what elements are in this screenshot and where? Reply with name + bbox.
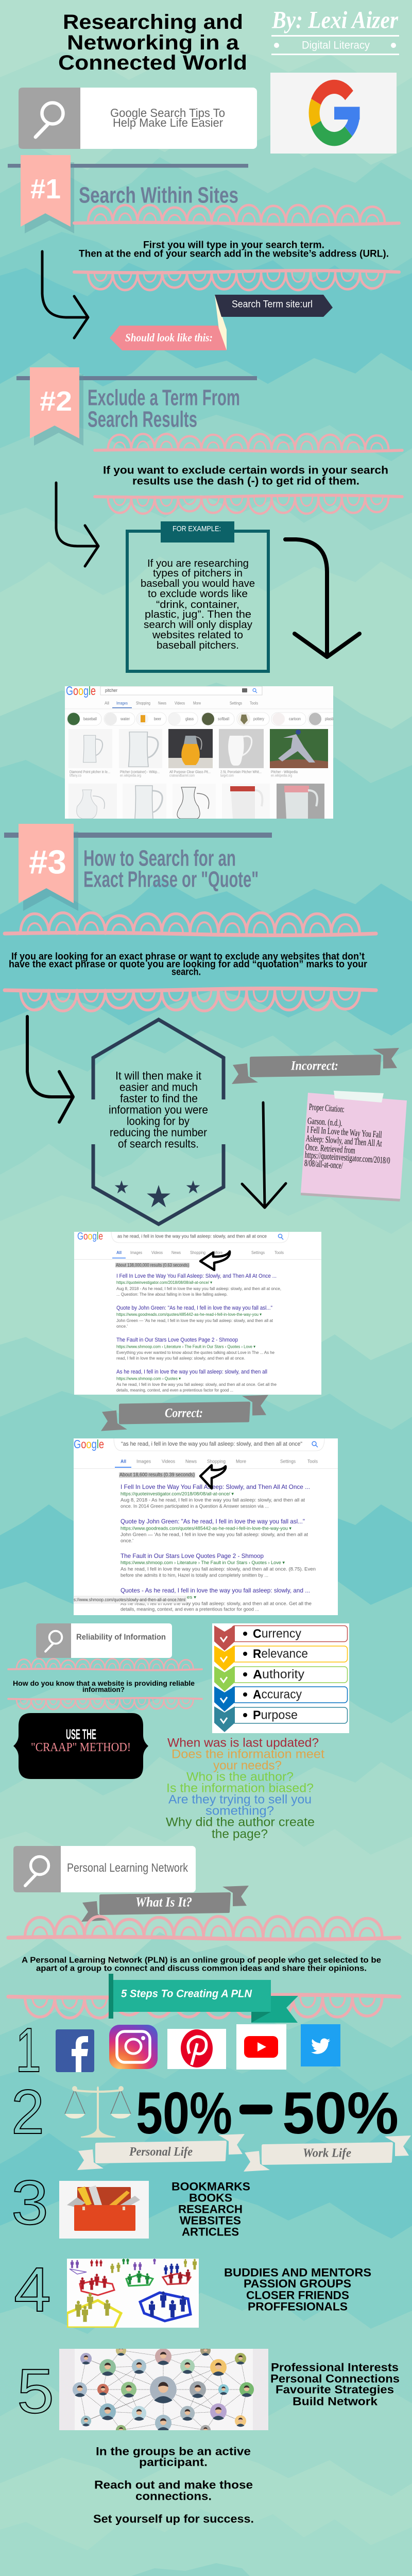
screenshot: google image search: Tools: [250, 701, 258, 706]
screenshot: correct search results: https://quoteinvestigator.com/2018/08/08/all-at-once/ ▾: [121, 1491, 234, 1497]
ribbon: correct: [101, 1395, 268, 1431]
ribbon: what is it: What Is It?: [135, 1895, 192, 1909]
text: reliability question: How do you know that a website is providing reliable: [13, 1679, 195, 1687]
scallop border: [8, 1995, 400, 2018]
text: craap questions: When was is last updated?: [167, 1736, 319, 1750]
screenshot: google image search: Settings: [230, 701, 242, 706]
screenshot: google image search: Videos: [175, 701, 185, 706]
text: tip 3 instructions: search.: [171, 967, 201, 978]
screenshot: correct search results: Videos: [162, 1459, 175, 1464]
text: tip 2 instructions: If you want to exclude certain words in your search: [103, 465, 388, 476]
screenshot: google image search: baseball: [83, 717, 97, 721]
screenshot: incorrect search results: As he read, I fell in love the way you fall asleep: slowly, and then all at once. Get all the: [116, 1382, 277, 1387]
text: step 5 interests: [270, 2361, 400, 2408]
text: step 3 resources: BOOKMARKS: [171, 2180, 250, 2193]
step 4 number: 4: [14, 2255, 51, 2325]
text: tip 1 instructions: Then at the end of your search add in the website’s address (URL).: [79, 248, 389, 260]
screenshot: correct search results: Shopping: [207, 1459, 226, 1464]
icon: pinterest: [167, 2029, 226, 2069]
stat: 50 percent personal life: 50%: [136, 2080, 232, 2146]
text: step 4 groups: PROFFESIONALS: [248, 2300, 348, 2313]
arrow: hand drawn pointer: [200, 1251, 230, 1270]
text: closing advice: connections.: [135, 2489, 212, 2503]
title: Networking in a: [67, 31, 239, 54]
panel: for example: to exclude words like: [148, 588, 248, 600]
screenshot: incorrect search results: https://www.shmoop.com › Literature › The Fault in Our Stars › Quotes › Love ▾: [116, 1344, 256, 1349]
scallop border: [95, 434, 402, 452]
screenshot: google image search: All: [105, 701, 109, 706]
heading: exclude a term: [88, 385, 240, 432]
text: step 5 interests: Professional Interests: [271, 2361, 399, 2374]
panel: for example: If you are researching: [147, 558, 249, 569]
text: pln definition: A Personal Learning Network (PLN) is an online group of people who get selected to be: [22, 1956, 381, 1965]
sticky note: proper citation: [301, 1091, 407, 1201]
screenshot: correct search results: News: [185, 1459, 197, 1464]
text: pln definition: apart of a group to connect and discuss common ideas and share their opinions.: [36, 1964, 367, 1973]
screenshot: correct search results: About 18,600 results (0.39 seconds): [119, 1472, 195, 1478]
sticky note: proper citation: Once. Retrieved from: [305, 1142, 355, 1156]
screenshot: incorrect search results: Tools: [274, 1250, 284, 1255]
text: step 4 groups: BUDDIES AND MENTORS: [224, 2266, 371, 2279]
chart: CRAAP list: Relevance: [253, 1647, 308, 1661]
panel: for example: search will only display: [144, 619, 252, 631]
text: craap questions: [166, 1736, 324, 1841]
scallop border: [74, 270, 399, 290]
image: people groups: [67, 2258, 199, 2328]
screenshot: incorrect search results: Everything you ever wanted to know about the quotes talking about Love in The ... As he: [116, 1350, 274, 1355]
screenshot: correct search results: As he read, I fell in love the way you fall asleep: slowly, and then all at once. (8.75). Even: [121, 1566, 316, 1572]
screenshot: incorrect search results: All: [116, 1250, 122, 1255]
panel: hexagon text: information you were: [109, 1104, 208, 1116]
screenshot: incorrect search results: Videos: [151, 1250, 163, 1255]
screenshot: incorrect search results: More: [214, 1250, 222, 1255]
screenshot: google image search: Google: [66, 684, 96, 698]
screenshot: correct search results: I Fell In Love the Way You Fall Asleep: Slowly, and Then All At Once ...: [121, 1483, 310, 1490]
screenshot: incorrect search results: Quote by John Green: "As he read, I fell in love the way you fall asl...": [116, 1305, 272, 1311]
stat: 50 percent personal life: Personal Life: [129, 2145, 193, 2159]
text: craap questions: Who is the author?: [186, 1770, 294, 1784]
screenshot: incorrect search results: Images: [130, 1250, 142, 1255]
dash between stats: [239, 2105, 272, 2114]
screenshot: incorrect search results: Google: [77, 1231, 103, 1242]
screenshot: incorrect search results: John Green — 'As he read, I fell in love the way you fall asleep: slowly, and then all at: [116, 1318, 273, 1323]
screenshot: incorrect search results: https://www.shmoop.com › Quotes ▾: [116, 1376, 181, 1381]
panel: hexagon text: It will then make it: [115, 1070, 201, 1082]
title: [58, 11, 247, 74]
screenshot: incorrect search results: [74, 1231, 321, 1395]
ribbon: what is it: [81, 1886, 249, 1922]
panel: google search tips: Google Search Tips To: [110, 106, 225, 120]
text: tip 3 instructions: [9, 951, 368, 978]
text: closing advice: [93, 2445, 254, 2526]
screenshot: correct search results: before she admits it to him, Hazel is totally and completely smitten by ...: [121, 1572, 268, 1579]
screenshot: correct search results: Quote by John Green: "As he read, I fell in love the way you fall asl...": [121, 1518, 305, 1525]
icon: instagram: [109, 2025, 158, 2069]
chart: CRAAP list: Currency: [253, 1627, 301, 1640]
screenshot: google image search: target.com: [220, 774, 234, 778]
screenshot: incorrect search results: Aug 8, 2018 - As he read, I fell in love the way you fall asleep: slowly, and then all at once,: [116, 1286, 281, 1291]
screenshot: google image search: All Purpose Clear Glass Pit...: [169, 771, 211, 774]
scallop border: [5, 989, 376, 1011]
screenshot: incorrect search results: ... Question: The line about falling in love is like falling asleep.: [116, 1292, 228, 1297]
tag: should look like this: Search Term site:url: [232, 299, 313, 310]
panel: for example: websites related to: [152, 630, 243, 641]
screenshot: google image search: Shopping: [136, 701, 150, 706]
icon: youtube: [236, 2024, 286, 2070]
screenshot: incorrect search results: Settings: [251, 1250, 265, 1255]
arrow: [27, 1016, 73, 1122]
step 1 number: 1: [15, 2015, 41, 2085]
text: step 3 resources: BOOKS: [189, 2192, 232, 2204]
text: tip 1 instructions: First you will type in your search term.: [143, 240, 324, 250]
panel: reliability of information: [36, 1623, 172, 1658]
screenshot: google image search: en.wikipedia.org: [120, 774, 141, 778]
image: people network: [59, 2345, 268, 2435]
screenshot: google image search: 2.5L Porcelain Pitcher Whit...: [220, 771, 262, 774]
banner: tip 3: [4, 824, 272, 911]
screenshot: google image search: More: [193, 701, 201, 706]
ribbon: incorrect: [232, 1048, 399, 1084]
text: reliability question: information?: [82, 1685, 125, 1693]
ribbon: incorrect: Incorrect:: [290, 1059, 338, 1073]
screenshot: correct search results: once. In 2014 Green participated in a Question & Answer session via ...: [121, 1503, 269, 1510]
panel: for example: “drink, container,: [156, 599, 239, 611]
scallop border: [8, 1698, 202, 1709]
panel: for example: [127, 521, 268, 671]
panel: hexagon text: easier and much: [119, 1081, 198, 1093]
text: craap questions: the page?: [212, 1827, 268, 1841]
panel: personal learning network: Personal Learning Network: [67, 1861, 188, 1874]
step 3 number: 3: [11, 2167, 48, 2238]
heading: exact phrase: Exact Phrase or "Quote": [83, 867, 259, 892]
screenshot: correct search results: The Fault in Our Stars Love Quotes Page 2 - Shmoop: [121, 1552, 264, 1560]
screenshot: incorrect search results: https://www.goodreads.com/quotes/485442-as-he-read-i-fell-in-love-the-way-you ▾: [116, 1312, 262, 1317]
panel: hexagon text: reducing the number: [110, 1126, 207, 1139]
screenshot: correct search results: details, meaning, context, and even a pretentious factor for good ...: [121, 1606, 259, 1613]
panel: reliability of information: Reliability of Information: [76, 1633, 166, 1641]
screenshot: incorrect search results: read, I fell in love the way you fall asleep: slowly, and then all at once.: [116, 1355, 245, 1361]
screenshot: google image search: softball: [218, 717, 229, 721]
text: craap questions: Why did the author create: [166, 1816, 315, 1829]
arrow: [285, 539, 359, 657]
scallop border: [8, 1659, 202, 1670]
screenshot: correct search results: Images: [136, 1459, 151, 1464]
text: craap questions: Are they trying to sell you: [168, 1793, 312, 1806]
ribbon: correct: Correct:: [165, 1406, 203, 1420]
screenshot: correct search results: https://www.shmoop.com › Literature › The Fault in Our Stars › Quotes › Love ▾: [121, 1560, 285, 1566]
screenshot: correct search results: John Green — 'As he read, I fell in love the way you fall asleep: slowly, and then all at: [121, 1532, 308, 1537]
text: step 4 groups: CLOSER FRIENDS: [246, 2289, 349, 2302]
author byline: [271, 6, 399, 55]
screenshot: correct search results: Quotes - As he read, I fell in love the way you fall asleep: slowly, and ...: [121, 1587, 310, 1594]
screenshot: incorrect search results: Shopping: [190, 1250, 205, 1255]
text: tip 3 instructions: If you are looking for an exact phrase or want to exclude any websites that don’t: [11, 951, 365, 962]
text: closing advice: participant.: [139, 2455, 208, 2469]
chart: CRAAP list: Authority: [253, 1667, 304, 1682]
sticky note: proper citation: Garson. (n.d.).: [307, 1115, 343, 1129]
text: tip 2 instructions: [103, 465, 388, 487]
text: step 4 groups: [224, 2266, 371, 2313]
sticky note: proper citation: Proper Citation:: [308, 1101, 345, 1114]
text: step 5 interests: Favourite Strategies: [276, 2383, 394, 2396]
scallop border: [8, 1917, 400, 1939]
banner: tip 1: #1: [30, 174, 61, 205]
scallop border: [74, 205, 399, 225]
text: step 5 interests: Build Network: [293, 2395, 378, 2408]
text: step 4 groups: PASSION GROUPS: [244, 2277, 351, 2290]
screenshot: correct search results: Settings: [280, 1459, 296, 1464]
text: step 3 resources: RESEARCH: [178, 2203, 243, 2215]
text: step 3 resources: ARTICLES: [182, 2226, 239, 2238]
screenshot: incorrect search results: As he read, I fell in love the way you fall asleep: slowly, and then all: [116, 1369, 267, 1375]
callout: use the craap method: USE THE: [66, 1726, 96, 1742]
tag: should look like this: Should look like this:: [125, 331, 213, 344]
arrow: [42, 251, 88, 338]
panel: for example: FOR EXAMPLE:: [173, 524, 221, 533]
icon: twitter: [301, 2024, 340, 2066]
banner: tip 1: [8, 155, 248, 233]
text: craap questions: Does the information meet: [171, 1748, 324, 1761]
text: pln definition: [22, 1956, 381, 1973]
author byline: Digital Literacy: [302, 39, 370, 52]
stat: 50 percent work life: Work Life: [303, 2146, 351, 2160]
stat: 50 percent personal life: [77, 2080, 245, 2170]
text: closing advice: Set yourself up for success.: [93, 2512, 254, 2526]
screenshot: incorrect search results: as he read, i fell in love the way you fall asleep: slowly, and then all at once: [117, 1233, 267, 1240]
screenshot: incorrect search results: About 138,000,000 results (0.63 seconds): [116, 1262, 189, 1267]
banner: tip 2: [16, 367, 257, 446]
screenshot: incorrect search results: details, meaning, context, and even a pretentious factor for good ...: [116, 1387, 233, 1393]
screenshot: correct search results: once.': [121, 1538, 133, 1544]
screenshot: google image search: News: [158, 701, 166, 706]
sticky note: proper citation: 8/08/all-at-once/: [304, 1158, 344, 1171]
screenshot: correct search results: More: [236, 1459, 246, 1464]
heading: exact phrase: How to Search for an: [83, 846, 236, 871]
panel: for example: types of pitchers in: [153, 568, 243, 579]
heading: exact phrase: [83, 846, 259, 892]
screenshot: google image search: plastic: [325, 717, 335, 721]
panel: hexagon text: faster to find the: [120, 1092, 198, 1105]
screenshot: incorrect search results: I Fell In Love the Way You Fall Asleep: Slowly, and Then All At Once ...: [116, 1273, 277, 1279]
step 2 number: 2: [11, 2077, 44, 2147]
arrow: hand drawn pointer: [200, 1465, 226, 1488]
text: tip 3 instructions: have the exact phrase or quote you are looking for add “quotation” marks to your: [9, 959, 368, 970]
text: craap questions: Is the information biased?: [166, 1782, 314, 1795]
screenshot: correct search results: https://www.goodreads.com/quotes/485442-as-he-read-i-fell-in-love-the-way-you ▾: [121, 1526, 291, 1531]
chart: CRAAP list: Accuracy: [253, 1688, 302, 1701]
panel: hexagon text: looking for by: [127, 1115, 190, 1127]
text: closing advice: Reach out and make those: [94, 2478, 253, 2492]
text: craap questions: your needs?: [213, 1759, 282, 1772]
callout: use the craap method: [13, 1713, 148, 1779]
heading: search within sites: Search Within Sites: [79, 182, 238, 208]
screenshot: incorrect search results: News: [171, 1250, 181, 1255]
banner: tip 3: #3: [29, 843, 66, 881]
screenshot: google image search: Pitcher - Wikipedia: [271, 771, 298, 774]
tag: should look like this: [110, 295, 333, 350]
screenshot: google image search: Pitcher (container) - Wikip...: [120, 771, 160, 774]
text: step 3 resources: [171, 2180, 250, 2238]
chart: CRAAP list: Purpose: [253, 1708, 298, 1722]
screenshot: correct search results: As he read, I fell in love the way you fall asleep: slowly, and then all at once. Get all the: [121, 1601, 312, 1606]
text: tip 1 instructions: [79, 240, 389, 260]
screenshot: google image search: tiffany.co: [70, 774, 81, 778]
icon: facebook: [56, 2029, 94, 2072]
image: toolbox: [59, 2181, 149, 2239]
panel: for example: baseball pitchers.: [157, 640, 239, 651]
stat: 50 percent work life: [244, 2080, 411, 2172]
scallop border: [5, 913, 376, 935]
title: Researching and: [63, 11, 243, 33]
text: craap questions: something?: [205, 1804, 274, 1818]
screenshot: google image search: Diamond Point pitcher in le...: [70, 771, 110, 774]
title: Connected World: [58, 52, 247, 74]
scallop border: [95, 495, 402, 514]
panel: google search tips: Help Make Life Easier: [113, 116, 223, 129]
panel: hexagon text: of search results.: [118, 1138, 199, 1150]
ribbon: 5 steps: [109, 1974, 298, 2023]
screenshot: correct search results: Aug 8, 2018 - As he read, I fell in love the way you fall asleep: slowly, and then all at: [121, 1497, 305, 1503]
screenshot: correct search results: Tools: [307, 1459, 318, 1464]
chart: CRAAP list: [212, 1623, 349, 1733]
screenshot: google image search: pottery: [253, 717, 264, 721]
screenshot: correct search results: es ▾: [187, 1595, 197, 1600]
text: step 5 interests: Personal Connections: [270, 2372, 400, 2385]
screenshot: correct search results: All: [121, 1459, 126, 1464]
screenshot: incorrect search results: https://quoteinvestigator.com/2018/08/08/all-at-once/ ▾: [116, 1280, 213, 1285]
icon: google logo: [270, 73, 397, 154]
panel: for example: plastic, jug”. Then the: [145, 609, 251, 620]
screenshot: google image search: [65, 684, 344, 822]
callout: use the craap method: "CRAAP" METHOD!: [31, 1741, 131, 1754]
icon: balance scale: [65, 2086, 131, 2138]
panel: for example: baseball you would have: [141, 578, 255, 589]
text: tip 2 instructions: results use the dash (-) to get rid of them.: [132, 475, 359, 487]
stat: 50 percent work life: 50%: [282, 2080, 399, 2146]
screenshot: correct search results: "as he read, i fell in love the way you fall asleep: slowly, and then all at once": [121, 1441, 302, 1447]
screenshot: google image search: beer: [154, 717, 161, 721]
screenshot: google image search: pitcher: [105, 688, 117, 693]
screenshot: correct search results: [74, 1437, 338, 1615]
screenshot: google image search: crateandbarrel.com: [169, 774, 195, 778]
text: closing advice: In the groups be an active: [96, 2445, 251, 2458]
screenshot: incorrect search results: The Fault in Our Stars Love Quotes Page 2 - Shmoop: [116, 1337, 238, 1343]
screenshot: google image search: en.wikipedia.org: [271, 774, 292, 778]
screenshot: google image search: glass: [185, 717, 194, 721]
heading: exclude a term: Search Results: [88, 407, 197, 432]
banner: tip 2: #2: [40, 386, 72, 417]
screenshot: google image search: Images: [116, 701, 128, 706]
ribbon: 5 steps: 5 Steps To Creating A PLN: [121, 1988, 252, 2000]
text: step 3 resources: WEBSITES: [180, 2214, 241, 2227]
screenshot: google image search: cartoon: [289, 717, 301, 721]
screenshot: correct search results: s://www.shmoop.com/quotes/slowly-and-then-all-at-once.html: [74, 1597, 185, 1602]
screenshot: incorrect search results: once.': [116, 1324, 128, 1329]
step 5 number: 5: [17, 2356, 54, 2426]
arrow: [56, 483, 98, 566]
arrow: [242, 1103, 286, 1208]
screenshot: google image search: water: [120, 717, 130, 721]
panel: personal learning network: [13, 1846, 196, 1892]
heading: exclude a term: Exclude a Term From: [88, 385, 240, 410]
text: reliability question: [13, 1679, 195, 1693]
panel: hexagon text: [93, 1020, 224, 1224]
screenshot: correct search results: Google: [74, 1437, 104, 1451]
panel: google search tips: [19, 88, 257, 149]
